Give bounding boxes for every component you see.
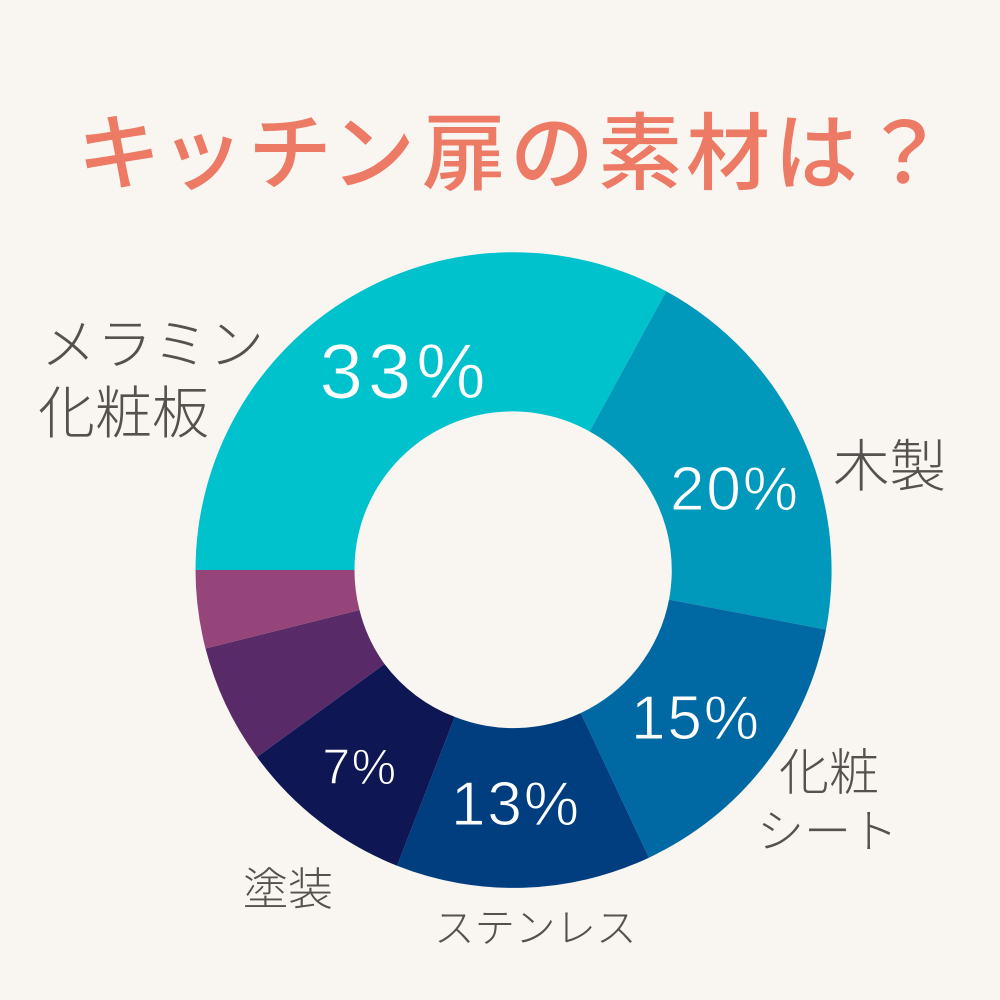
label: melamine: 化粧板 (38, 382, 209, 446)
label: painted: 塗装 (243, 864, 333, 915)
value: 33%: 33% (319, 327, 491, 415)
segment: melamine 33% (196, 252, 666, 570)
value: 7%: 7% (322, 739, 398, 795)
segment: painted 7% (257, 664, 455, 866)
segment: decorative sheet 15% (581, 600, 826, 858)
segment: mauve (196, 570, 360, 648)
label: stainless: ステンレス (434, 905, 636, 951)
value: 20%: 20% (670, 455, 800, 524)
label: wood: 木製 (833, 435, 946, 498)
title: キッチン扉の素材は？ (77, 87, 946, 208)
label: melamine: メラミン (41, 314, 265, 376)
segment: wood 20% (590, 291, 832, 630)
value: 15%: 15% (631, 684, 761, 753)
label: decorative sheet: 化粧 (779, 745, 879, 801)
value: 13%: 13% (451, 770, 581, 839)
segment: purple (206, 610, 384, 757)
donut chart (196, 252, 832, 888)
segment: stainless 13% (397, 713, 649, 888)
label: decorative sheet (757, 745, 898, 858)
label: decorative sheet: シート (757, 805, 898, 858)
label: melamine (38, 314, 265, 446)
